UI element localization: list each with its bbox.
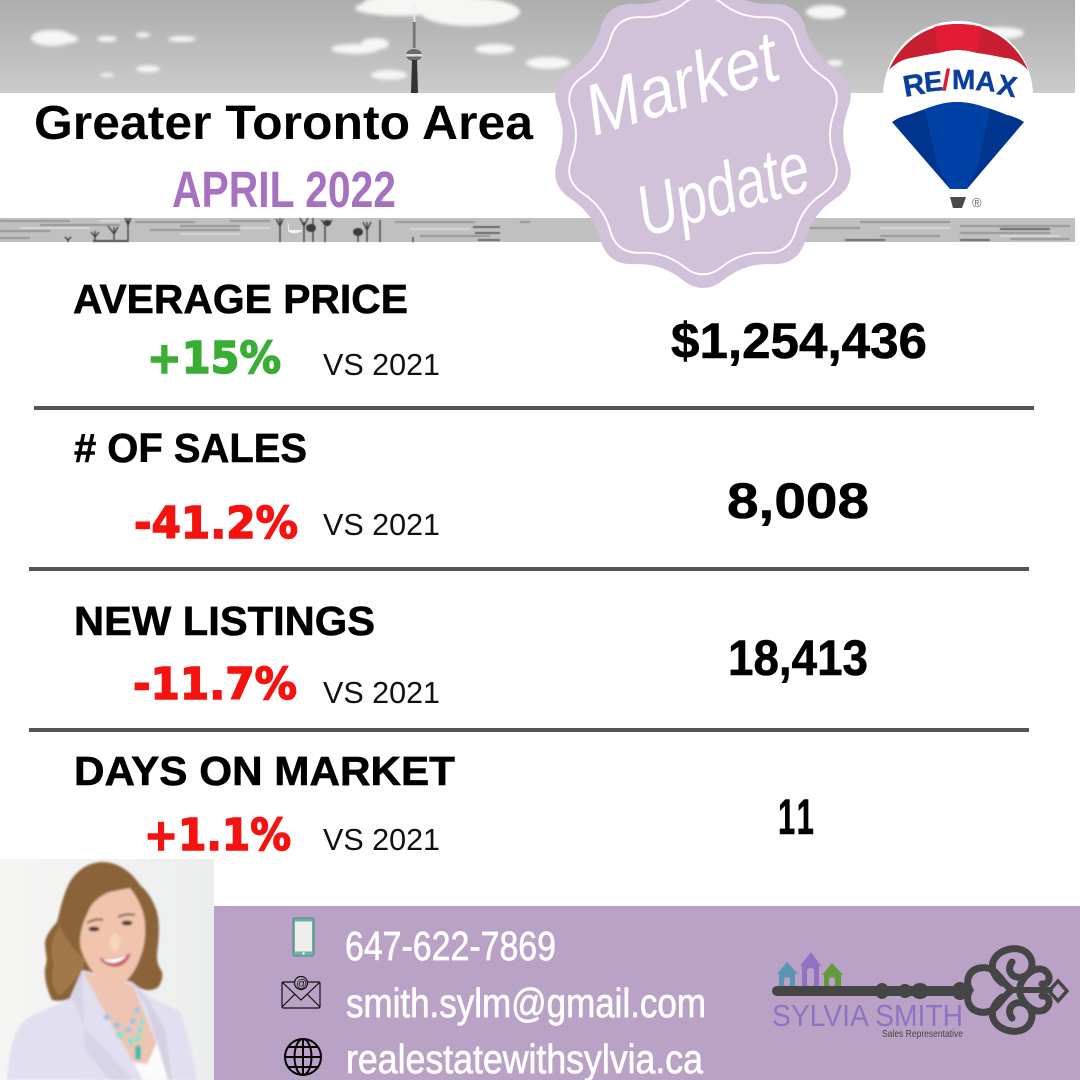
logo: RE/MAX balloon: / xyxy=(942,64,951,97)
panel: number of sales: -41.2% xyxy=(134,498,298,549)
badge: market update xyxy=(555,0,851,288)
footer panel xyxy=(214,906,1080,1080)
panel: number of sales: VS 2021 xyxy=(323,507,440,542)
panel: new listings: 18,413 xyxy=(728,630,868,686)
logo: Sylvia Smith key: SYLVIA SMITH xyxy=(772,998,963,1033)
panel: days on market: VS 2021 xyxy=(323,822,440,857)
panel: days on market: +1.1% xyxy=(144,810,291,861)
panel: new listings: -11.7% xyxy=(133,659,297,710)
badge: market update: Update xyxy=(627,127,819,252)
icon: houses xyxy=(777,952,843,987)
logo: RE/MAX balloon: M xyxy=(952,64,975,95)
icon: phone xyxy=(293,918,314,956)
agent portrait xyxy=(0,859,214,1080)
panel: days on market: 11 xyxy=(778,788,814,845)
logo: RE/MAX balloon xyxy=(883,21,1033,210)
title: Greater Toronto Area xyxy=(34,97,533,150)
badge: market update: Market xyxy=(575,16,791,151)
panel: new listings: VS 2021 xyxy=(323,675,440,710)
panel: days on market: DAYS ON MARKET xyxy=(74,748,455,794)
logo: RE/MAX balloon: R xyxy=(900,68,928,104)
panel: new listings xyxy=(74,598,868,710)
contact: phone number: 647-622-7869 xyxy=(345,923,556,969)
panel: new listings: NEW LISTINGS xyxy=(74,598,375,644)
panel: average price xyxy=(73,276,927,384)
panel: number of sales: # OF SALES xyxy=(74,425,307,471)
icon: globe xyxy=(285,1039,321,1075)
panel: average price: AVERAGE PRICE xyxy=(73,276,408,322)
panel: number of sales: 8,008 xyxy=(727,473,869,529)
logo: RE/MAX balloon: A xyxy=(974,65,997,98)
contact: email address: smith.sylm@gmail.com xyxy=(346,980,706,1026)
logo: RE/MAX balloon: X xyxy=(995,69,1020,104)
panel: days on market xyxy=(74,748,814,861)
subtitle: date: APRIL 2022 xyxy=(172,161,396,218)
icon: key xyxy=(777,949,1067,1031)
water photo band xyxy=(0,218,1075,242)
logo: Sylvia Smith key xyxy=(772,949,1067,1040)
panel: number of sales xyxy=(74,425,869,549)
logo: Sylvia Smith key: Sales Representative xyxy=(882,1028,963,1040)
panel: average price: $1,254,436 xyxy=(671,313,927,369)
panel: average price: +15% xyxy=(147,333,281,384)
icon: email xyxy=(282,976,320,1008)
icon: CN Tower xyxy=(406,4,422,93)
icon: email: @ xyxy=(296,978,307,990)
logo: RE/MAX balloon: ® xyxy=(972,195,982,210)
sky photo band xyxy=(0,0,1075,93)
logo: RE/MAX balloon: E xyxy=(922,65,944,98)
panel: average price: VS 2021 xyxy=(323,347,440,382)
